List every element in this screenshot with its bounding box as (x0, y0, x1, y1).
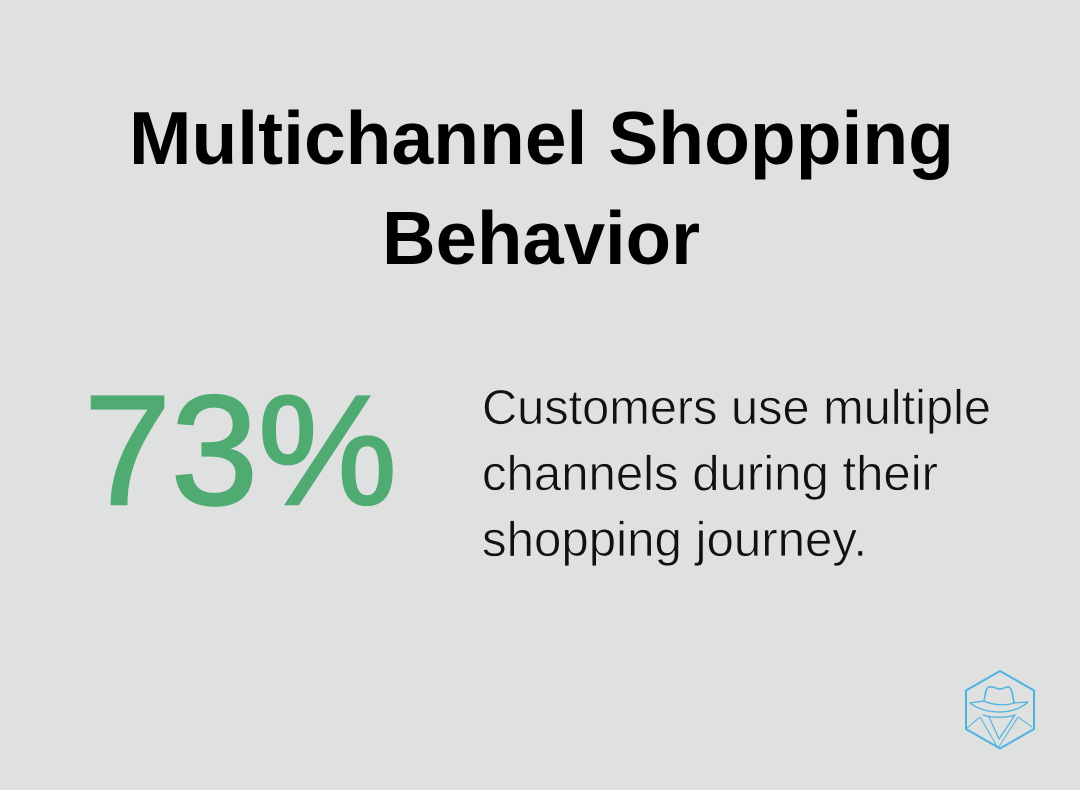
description text: channels during their (482, 447, 938, 501)
title: Multichannel Shopping (129, 96, 954, 180)
icon: hexagon logo with hat (966, 671, 1034, 748)
statistic: 73%: 73% (84, 364, 397, 538)
description text: Customers use multiple (482, 381, 991, 435)
description text (482, 381, 991, 567)
title (129, 96, 954, 280)
title: Behavior (382, 196, 700, 280)
description text: shopping journey. (482, 513, 867, 567)
